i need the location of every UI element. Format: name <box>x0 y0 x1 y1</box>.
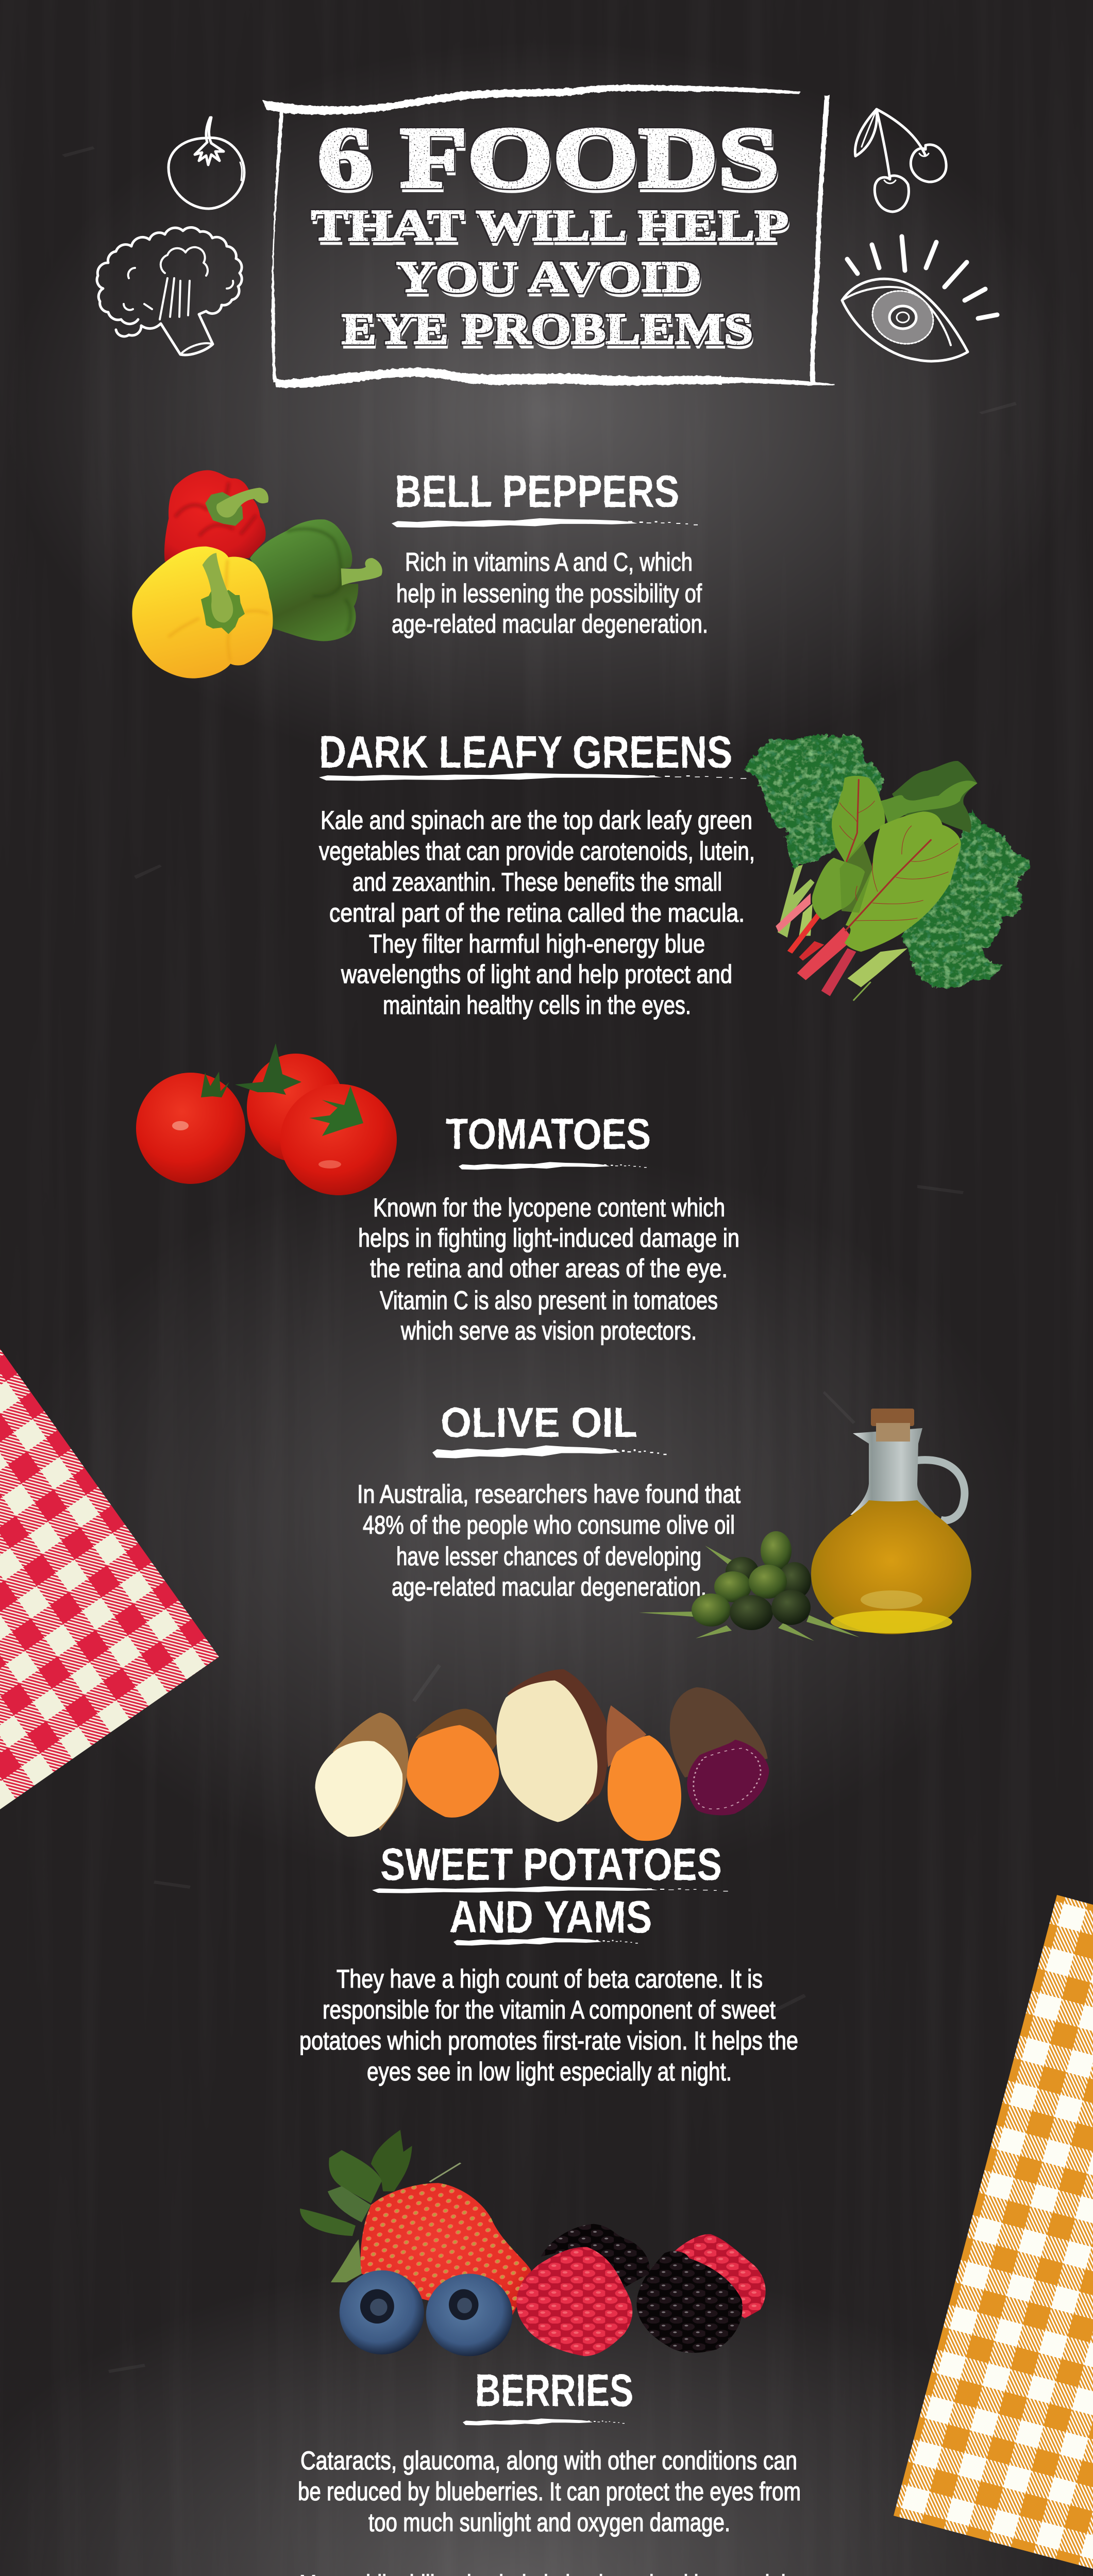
heading: sweet potatoes: SWEET POTATOES <box>380 1839 722 1890</box>
heading: olive oil: OLIVE OIL <box>441 1399 637 1446</box>
text: tomatoes: Known for the lycopene content which <box>373 1193 725 1222</box>
underline: olive oil <box>432 1446 666 1458</box>
photo: bell peppers <box>132 470 382 679</box>
text: sweet potatoes: eyes see in low light especially at night. <box>367 2057 732 2086</box>
text: olive oil <box>357 1480 741 1601</box>
icon: eye <box>842 236 997 361</box>
underline: sweet potatoes <box>372 1886 728 1893</box>
text: sweet potatoes: potatoes which promotes first-rate vision. It helps the <box>299 2026 798 2055</box>
text: olive oil: have lesser chances of developing <box>396 1542 701 1571</box>
text: dark leafy greens: central part of the retina called the macula. <box>329 899 745 927</box>
panel: dark leafy greens <box>319 726 1030 1020</box>
photo: tomatoes <box>136 1043 397 1195</box>
text: dark leafy greens: vegetables that can provide carotenoids, lutein, <box>319 837 755 866</box>
text: olive oil: 48% of the people who consume olive oil <box>363 1511 735 1539</box>
panel: sweet potatoes and yams <box>299 1669 798 2086</box>
underline: tomatoes <box>459 1162 647 1170</box>
title frame <box>263 84 835 388</box>
text: dark leafy greens: and zeaxanthin. These benefits the small <box>352 868 722 896</box>
photo: olive oil bottle and olives <box>639 1409 971 1641</box>
title: 6 FOODS <box>317 110 779 206</box>
text: sweet potatoes: responsible for the vitamin A component of sweet <box>323 1995 776 2024</box>
photo: kale and chard <box>743 735 1030 1001</box>
text: berries: be reduced by blueberries. It can protect the eyes from <box>298 2477 801 2506</box>
heading: bell peppers: BELL PEPPERS <box>395 466 679 517</box>
heading: dark leafy greens: DARK LEAFY GREENS <box>319 726 732 777</box>
underline: and yams <box>453 1938 638 1945</box>
text: dark leafy greens: maintain healthy cells in the eyes. <box>383 991 691 1020</box>
text: bell peppers: Rich in vitamins A and C, which <box>405 548 693 577</box>
text: sweet potatoes <box>299 1964 798 2086</box>
text: berries: too much sunlight and oxygen damage. <box>368 2508 730 2537</box>
text: tomatoes: Vitamin C is also present in tomatoes <box>380 1286 718 1315</box>
text: dark leafy greens: Kale and spinach are the top dark leafy green <box>321 806 752 835</box>
underline: dark leafy greens <box>319 773 746 781</box>
text: tomatoes <box>358 1193 739 1345</box>
panel: bell peppers <box>132 466 708 679</box>
panel: tomatoes <box>136 1043 739 1345</box>
red gingham tablecloth <box>0 1349 219 1809</box>
orange gingham tablecloth <box>894 1895 1093 2569</box>
text: tomatoes: which serve as vision protectors. <box>400 1316 697 1345</box>
photo: berries <box>300 2130 766 2356</box>
text: bell peppers: age-related macular degeneration. <box>392 609 708 638</box>
text: berries <box>298 2446 801 2576</box>
text: sweet potatoes: They have a high count of beta carotene. It is <box>337 1964 763 1993</box>
text: bell peppers <box>392 548 708 638</box>
underline: berries <box>463 2418 625 2426</box>
photo: sweet potatoes and yams <box>315 1669 769 1841</box>
text: olive oil: In Australia, researchers have found that <box>357 1480 741 1509</box>
heading: and yams: AND YAMS <box>449 1891 652 1942</box>
heading: tomatoes: TOMATOES <box>446 1110 651 1158</box>
text: bell peppers: help in lessening the possibility of <box>396 579 702 608</box>
text: tomatoes: the retina and other areas of the eye. <box>370 1254 728 1283</box>
text: olive oil: age-related macular degeneration. <box>392 1572 707 1601</box>
title: YOU AVOID <box>396 252 701 301</box>
icon: cherries <box>855 109 946 212</box>
text: berries: Cataracts, glaucoma, along with other conditions can <box>300 2446 797 2475</box>
text: dark leafy greens <box>319 806 755 1020</box>
text: dark leafy greens: They filter harmful high-energy blue <box>369 929 705 958</box>
title <box>311 110 788 353</box>
heading: berries: BERRIES <box>475 2365 633 2416</box>
icon: broccoli <box>97 227 242 355</box>
title: THAT WILL HELP <box>311 200 788 250</box>
panel: berries <box>298 2130 801 2576</box>
text: tomatoes: helps in fighting light-induced damage in <box>358 1224 739 1252</box>
underline: bell peppers <box>392 518 698 528</box>
title: EYE PROBLEMS <box>342 304 753 353</box>
panel: olive oil <box>357 1399 971 1641</box>
icon: tomato <box>169 117 244 209</box>
text: dark leafy greens: wavelengths of light and help protect and <box>341 960 732 989</box>
